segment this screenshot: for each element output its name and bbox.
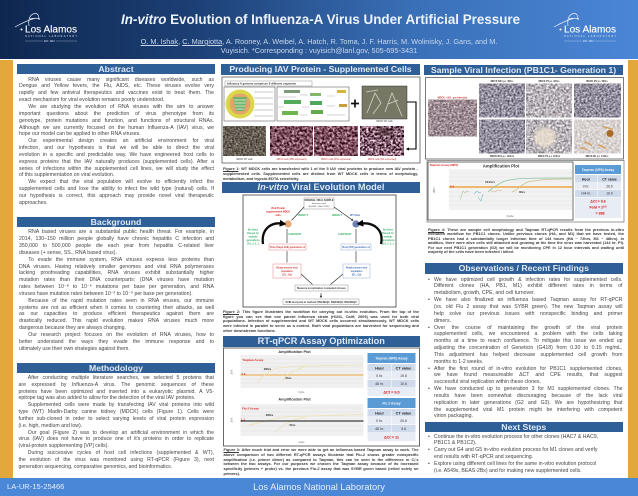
caption: figure 2: other downstream functions. bbox=[223, 329, 276, 333]
authors: O. M. Ishak, C. Margiotta, A. Rooney, A. Weibel, A. Hatch, R. Toma, J. F. Harris, M. Wolinisky, J. Gans, and M. bbox=[141, 37, 497, 46]
micrograph: MDCK WT cells bbox=[362, 86, 407, 123]
text: observations bullets: We have conducted up to generation 3 for M1 supplemented clones. The bbox=[434, 386, 622, 392]
green step labels: INFECT bbox=[332, 213, 342, 217]
text: abstract: express proteins that the IAV naturally produces (supplemented cells). After a bbox=[19, 159, 214, 165]
heading: in-vitro viral evolution model: In-vitro Viral Evolution Model bbox=[258, 182, 384, 192]
text: abstract: important questions about the prediction of virus phenotype from its bbox=[19, 111, 214, 117]
header banner bbox=[0, 0, 638, 59]
text: methodology: (viral-protein supplementing [VP] cells). bbox=[18, 443, 109, 449]
chart: Flu-2 amplification plot: Cycle bbox=[298, 441, 305, 444]
heading: RT-qPCR assay optimization bbox=[222, 336, 420, 347]
harvest nucleotide boxes: Ready amount viral bbox=[346, 266, 367, 270]
table: Flu-2 assay: ΔCt = 11 bbox=[383, 436, 399, 440]
table: Taqman NP6 PB1C1: Hour bbox=[582, 177, 591, 181]
text: methodology: During successive cycles of host cell infections (supplemented & WT), bbox=[28, 450, 214, 456]
chart: Taqman amplification plot: 48hrs bbox=[263, 367, 271, 371]
virus generation boxes: Virus (WT) generation x1 bbox=[342, 246, 371, 249]
micrograph row bbox=[223, 126, 404, 161]
chart: Taqman amplification plot bbox=[230, 350, 363, 394]
table: Taqman NP6 assay: 0 hr. bbox=[376, 374, 382, 378]
supplemented cell branch labels: Viral Protein bbox=[271, 207, 286, 210]
text: background: ultimately use their own strategies against them. bbox=[19, 346, 130, 352]
table: Flu-2 assay: 20.6 bbox=[400, 419, 406, 423]
panel: observations: • bbox=[428, 277, 430, 283]
figure 3 bbox=[223, 348, 420, 446]
panel: producing IAV protein bbox=[221, 64, 420, 181]
table: Taqman NP6 PB1C1: 144 hr. bbox=[581, 192, 591, 196]
panel: observations: • bbox=[428, 297, 430, 303]
table: Taqman NP6 assay: Hour bbox=[375, 366, 384, 370]
green step labels: By Select bbox=[248, 228, 258, 232]
micrograph: MDCK WT cells: MDCK WT cells bbox=[376, 121, 393, 123]
caption: figure 1: metabolism, and trypsin-EDTA sensitivity. bbox=[223, 177, 299, 181]
chart: Flu-2 amplification plot: Amplification Plot bbox=[278, 398, 311, 402]
heading: next steps: Next Steps bbox=[501, 422, 546, 432]
green step labels bbox=[246, 213, 395, 246]
text: background: better understand the ways they evade the immune response and to bbox=[19, 339, 214, 345]
text: observations bullets: (vs. old Flu 2 assay that was SYBR green). The new Taqman assay will bbox=[434, 304, 622, 310]
text: observations bullets: We have optimized cell growth & infection rates for supplemented cells. bbox=[434, 277, 622, 283]
text: next steps bullets: end results with RT-qPCR and sequencing. bbox=[434, 454, 533, 460]
table: Flu-2 assay: Flu 2 Assay bbox=[382, 402, 400, 406]
table: Flu-2 assay: 0 hr. bbox=[376, 419, 382, 423]
chart: PB1C1 amplification plot: Amplification Plot bbox=[483, 164, 520, 168]
chart: Flu-2 amplification plot: 0hrs bbox=[289, 423, 295, 427]
harvest nucleotide boxes: (G1...Gy) bbox=[352, 274, 362, 276]
table: Taqman NP6 PB1C1: CT value bbox=[602, 177, 617, 181]
cell icons bbox=[284, 220, 360, 228]
harvest nucleotide boxes: Ready amount viral bbox=[276, 266, 298, 270]
green step labels: Passed for bbox=[382, 233, 394, 235]
caption: figure 3: Figure 3: After much trial and error we were able to get an influenza based Taqman assay to work. The bbox=[224, 448, 418, 452]
text: methodology: (i.e. high, medium and low). bbox=[18, 423, 82, 429]
harvest nucleotide boxes: population bbox=[281, 270, 293, 273]
text: background: as our capacities to produce efficient therapeutics against them are bbox=[19, 311, 214, 317]
panel: next steps: • bbox=[428, 434, 430, 440]
text: next steps bullets: Carry out G4 and G5 in-vitro evolution process for M1 clones and verify bbox=[434, 447, 597, 453]
text: observations bullets: This adjustment has helped decrease supplemented cell growth from bbox=[434, 352, 622, 358]
table: Taqman NP6 assay: 10.6 bbox=[400, 382, 406, 386]
micrographs: bottom row: MDCK P4 p.i. 144hrs bbox=[538, 154, 561, 157]
caption: figure 2 bbox=[223, 310, 419, 333]
arrow: cells to supplemented bbox=[407, 102, 416, 149]
text: methodology: proteins have been optimized and inserted into a eukaryotic plasmid. A V5- bbox=[18, 389, 214, 395]
genome segments diagram bbox=[277, 87, 349, 121]
text: abstract: infection, and our hypothesis is that we will be able to direct the viral bbox=[19, 145, 214, 151]
measure box: Measure & replication competent viruses bbox=[297, 287, 346, 290]
heading: observations: Observations / Recent Findings bbox=[459, 263, 589, 273]
text: observations bullets: After the first round of in-vitro evolution for PB1C1 supplemented clones, bbox=[434, 366, 622, 372]
text: observations bullets: supplemented cells, we encountered a problem with the cells taking bbox=[434, 331, 622, 337]
panel: methodology bbox=[17, 363, 215, 470]
text: methodology: Our goal (Figure 2) was to develop an artificial environment in which the bbox=[28, 430, 214, 436]
panel: in-vitro viral evolution model bbox=[222, 182, 420, 333]
table: Taqman NP6 assay: ΔCt = 9.0 bbox=[383, 390, 399, 394]
table: Flu-2 assay: 48 hr. bbox=[375, 427, 383, 431]
text: background: 2014, 130–150 million people globally have chronic hepatitis C infection and bbox=[19, 236, 214, 242]
panel: RT-qPCR assay optimization bbox=[223, 336, 420, 476]
text: background: mutation rates than their DNA counterparts; (DNA viruses have mutation bbox=[19, 277, 214, 283]
parent strain box: ORIGINAL VIRAL SAMPLE bbox=[305, 199, 334, 202]
micrographs: top row: MDCK M1 p.i. 96hrs bbox=[586, 80, 608, 82]
harvest arrows bbox=[287, 229, 356, 298]
text: methodology: After conducting multiple literature searches, we selected 5 proteins that bbox=[28, 375, 214, 381]
chart: Taqman amplification plot: 0hrs bbox=[285, 376, 291, 380]
caption: figure 4: PB1C1 clones had a substantially longer infection time of 144 hours (HA ~ 72hrs, M1 ~ 48hrs). In bbox=[428, 237, 624, 241]
panel: observations: • bbox=[428, 386, 430, 392]
text: observations bullets: we have found measureable ΔCT and CPE results, that suggest bbox=[434, 372, 622, 378]
figure 2: workflow diagram bbox=[242, 194, 396, 308]
chart: Flu-2 amplification plot: 1.1 bbox=[240, 418, 245, 422]
logo: Los Alamos left: NATIONAL LABORATORY bbox=[25, 35, 77, 38]
caption: figure 4: For our next PB1C1 generation (G2) we will be monitoring CPE in 12 hour intervals and waiting until bbox=[428, 246, 624, 250]
measure box bbox=[295, 285, 348, 291]
text: observations bullets: adjusting the concentration of Geneticin (G418) from 0.30 to 0.15 mg/mL. bbox=[434, 345, 622, 351]
table: Taqman NP6 assay: 48 hr. bbox=[375, 382, 383, 386]
heading: methodology bbox=[17, 363, 215, 373]
panel: background bbox=[17, 217, 215, 352]
virus diagram bbox=[224, 87, 275, 121]
caption: figure 3: specificity (primers + probe) vs. the previous Flu-2 assay that was SYBR green based (relied solely on bbox=[224, 467, 418, 471]
text: abstract: Our experimental design creates an artificial environment for viral bbox=[28, 138, 214, 144]
caption: figure 1 bbox=[223, 167, 418, 181]
text: methodology: epitope tag was also added to allow for the detection of the viral IAV proteins. bbox=[18, 395, 195, 401]
micrographs: top row: MDCK P4 p.i. 96hrs bbox=[538, 80, 560, 82]
text: abstract: approaches. bbox=[19, 200, 48, 206]
text: methodology: the evolution of the virus was monitored using RT-qPCR (Figure 3), next bbox=[18, 457, 214, 463]
logo: Los Alamos left: Los Alamos bbox=[25, 24, 77, 36]
caption: figure 1: supplemented cells. Supplemented cells are distinct from WT MDCK cells in terms of morphology, bbox=[223, 172, 418, 176]
caption: figure 3 bbox=[224, 448, 418, 476]
text: methodology: Supplemented cells were made by transfecting IAV viral proteins into wild bbox=[28, 402, 214, 408]
caption: figure 4: majority of the cells have been infected / killed. bbox=[428, 250, 514, 254]
heading: abstract bbox=[17, 64, 215, 74]
panel: observations bbox=[425, 263, 623, 419]
authors bbox=[140, 37, 497, 55]
text: abstract: our hypothesis is correct, this approach may provide novel viral therapeutic bbox=[19, 193, 214, 199]
table: Taqman NP6 PB1C1: ΔCt = 9.6 bbox=[590, 199, 606, 203]
text: observations bullets: the supplemented viral M1 protein might be interfering with competent bbox=[434, 407, 622, 413]
text: observations bullets: Over the course of maintaining the growth of the viral protein bbox=[434, 324, 622, 330]
parent strain box bbox=[304, 198, 334, 209]
figure label: Influenza A genome comprises 8 different segments bbox=[227, 82, 297, 86]
infection arrows bbox=[292, 207, 353, 220]
caption: figure 1: Figure 1: WT MDCK cells are transfected with 1 of the 5 IAV viral proteins to produce new IAV protein - bbox=[223, 167, 418, 171]
green step labels: HARVEST bbox=[288, 232, 302, 236]
chart: Taqman amplification plot: Taqman Assay bbox=[242, 358, 263, 362]
sequencing box: SVIN and point in method: RNASEQ1, RNASEQ2, RNASEQ3 bbox=[286, 301, 357, 304]
chart: Taqman amplification plot: Amplification Plot bbox=[278, 350, 311, 354]
text: background: viruses have mutation rates between 10⁻³ to 10⁻⁵ per base per generation). bbox=[19, 291, 193, 297]
text: background: rates between 10⁻⁸ to 10⁻⁶ mutations per base per generation, and RNA bbox=[19, 284, 214, 290]
caption: figure 3: amplification (i.e. primer dimer) as compared to Taqman, this can be seen in the difference in Cₜ's bbox=[224, 458, 418, 462]
table: Taqman NP6 PB1C1: = 388 bbox=[595, 212, 605, 216]
chart: Flu-2 amplification plot: Flu-2 Assay bbox=[242, 406, 259, 410]
chart: Flu-2 amplification plot: 48hrs bbox=[265, 413, 273, 417]
micrograph: no-infection control bbox=[428, 96, 477, 136]
authors: Vuyisich. *Corresponding : vuyisich@lanl.gov, 505-695-3431 bbox=[221, 46, 417, 55]
green step labels: Passed for bbox=[247, 233, 259, 235]
text: background: RNA based viruses are a substantial public health threat. For example, in bbox=[28, 229, 214, 235]
text: background bbox=[19, 229, 214, 352]
text: abstract: rapidly and few antiviral therapeutics and vaccines exist to treat them. The bbox=[19, 90, 214, 96]
table: Taqman NP6 PB1C1: Fold = 2 bbox=[589, 206, 603, 210]
logo: Los Alamos left bbox=[14, 13, 77, 43]
text: observations bullets: Different clones (HA, PB1, M1) exhibit different rates in terms of bbox=[434, 283, 622, 289]
text: methodology: generation sequencing, comparative genomics, and bioinformatics. bbox=[18, 464, 172, 470]
heading: next steps bbox=[425, 422, 622, 432]
heading: sample viral infection: Sample Viral Infection (PB1C1- Generation 1) bbox=[431, 64, 616, 74]
text: abstract: of this supplementation on viral evolution. bbox=[19, 172, 114, 178]
panel: next steps: • bbox=[428, 447, 430, 453]
micrographs: top row bbox=[479, 80, 621, 117]
table: Taqman NP6 PB1C1 bbox=[575, 165, 621, 218]
chart: PB1C1 amplification plot: 144 hrs bbox=[485, 180, 495, 184]
panel: abstract bbox=[17, 64, 215, 206]
text: abstract: Dengue and Yellow fevers, the Flu, AIDS, etc. These viruses evolve very bbox=[19, 83, 214, 89]
caption: figure 4: addition, there were alive cells still attached and growing at the time the virus was harvested (144 hr. PI). bbox=[428, 241, 624, 245]
caption: figure 2: figure you can see that one parent influenza strain (H1N1, Calif, 2009) was used for both viral bbox=[223, 315, 419, 319]
text: background: diseases (+ sense, SS., RNA based virus). bbox=[19, 250, 117, 256]
text: background: lacking proofreading capabilities, RNA viruses exhibit substantially higher bbox=[19, 270, 214, 276]
text: background: 350,000 to 500,000 people die each year from hepatitis C-related liver bbox=[19, 243, 214, 249]
text: methodology: further sub-cloned in order to select varying levels of viral protein expression bbox=[18, 416, 214, 422]
text: background: Our research project focuses on the evolution of RNA viruses, how to bbox=[28, 332, 214, 338]
micrographs: bottom row: MDCK NS1 p.i. 144hrs bbox=[490, 154, 515, 157]
supplemented cell branch labels: supplemented MDCK bbox=[266, 210, 290, 214]
right gold band bbox=[628, 60, 638, 478]
logo: Los Alamos right: EST. 1943 bbox=[583, 41, 594, 43]
text: abstract: exact mechanism for viral evolution remains poorly understood. bbox=[19, 97, 164, 103]
text: observations bullets: replication in later generations (G2 and G3). We are hypothesizing that bbox=[434, 400, 622, 406]
chart: Taqman amplification plot: 0.6 bbox=[241, 372, 245, 376]
text: background: drastically reduced. This rapid evolution makes RNA viruses much more bbox=[19, 318, 214, 324]
text: observations bullets: metabolism, growth, CPE, and cell turnover. bbox=[434, 290, 535, 296]
caption: figure 2: populations. Infection of supplemented and WT MDCK cells occurred simultaneously. WT MDCK cells bbox=[223, 319, 419, 323]
virus generation boxes: Virus (Supp Cell) generation x1 bbox=[270, 246, 306, 249]
text: background: To evade the immune system, RNA viruses express less proteins than bbox=[28, 257, 214, 263]
text: next steps bullets: Explore using different cell lines for the same in-vitro evolution protocol bbox=[434, 461, 596, 467]
report number: LA-UR-15-25466 bbox=[7, 482, 64, 491]
panel: observations: • bbox=[428, 366, 430, 372]
text: observations bullets: virion packaging. bbox=[434, 413, 473, 419]
heading: observations bbox=[425, 263, 622, 274]
table: Taqman NP6 assay: Taqman (NP6) Assay bbox=[375, 356, 407, 360]
green step labels: multiple bbox=[384, 236, 393, 238]
supplemented cell branch labels: cells bbox=[275, 214, 281, 217]
text: methodology bbox=[18, 375, 214, 470]
caption: figure 4: Figure 4: These are sample cell morphology and Taqman RT-qPCR results from the previous in-vitro bbox=[428, 228, 624, 232]
text: observations bullets: results have been somewhat discouraging because of the lack viral bbox=[434, 393, 622, 399]
micrographs: bottom row: MDCK M1 p.i. 144hrs bbox=[586, 154, 609, 157]
chart: Taqman amplification plot: Cycle bbox=[298, 391, 305, 394]
text: abstract: supplemented cells and lose the ability to infect the wild type (natural) cells. If bbox=[19, 186, 214, 192]
text: abstract: evolution in a specific and predictable way. We have engineered host cells to bbox=[19, 152, 214, 158]
figure 4: amplification plot and table bbox=[426, 160, 624, 222]
caption: figure 3: above comparison of two different RT-qPCR assays illustrate that Flu-2 shows greater nonspecific bbox=[224, 453, 418, 457]
parent strain box: Infectious stock bbox=[312, 202, 327, 205]
figure label bbox=[225, 81, 312, 86]
table: Taqman NP6 PB1C1: 0 hr. bbox=[583, 184, 589, 188]
left gold band bbox=[0, 60, 13, 478]
heading: methodology: Methodology bbox=[89, 363, 143, 373]
text: next steps bullets: (i.e. A549s, BEAS-2Bs) and for making new supplemented cells. bbox=[434, 468, 582, 474]
text: abstract: RNA viruses cause many significant diseases worldwide, such as bbox=[28, 77, 214, 83]
harvest nucleotide boxes: (G1...Gy) bbox=[282, 274, 292, 276]
table: Taqman NP6 PB1C1: 9.6 bbox=[603, 206, 607, 208]
chart: PB1C1 amplification plot: Cycle bbox=[506, 214, 514, 218]
table: Taqman NP6 assay: CT value bbox=[395, 366, 411, 370]
caption: figure 2: were infected in parallel to serve as a control. Both viral populations are harvested for sequencing and bbox=[223, 324, 419, 328]
heading: background bbox=[17, 217, 215, 227]
text: next steps bullets bbox=[428, 434, 598, 474]
table: Taqman NP6 PB1C1: 16.9 bbox=[606, 192, 613, 196]
table: Flu-2 assay: Hour bbox=[375, 411, 384, 415]
panel: next steps: • bbox=[428, 461, 430, 467]
table: Taqman NP6 PB1C1: 26.5 bbox=[606, 184, 613, 188]
text: background: dangerous because they are always changing. bbox=[19, 325, 126, 331]
text: abstract: We expect that the viral population will evolve to efficiently infect the bbox=[28, 179, 214, 185]
chart: PB1C1 amplification plot: 0.2 bbox=[450, 184, 455, 188]
chart: PB1C1 amplification plot: ΔRn bbox=[432, 187, 436, 193]
caption: figure 4 bbox=[428, 228, 624, 254]
caption: figure 3: between the two assays. For our purposes we chosen the Taqman assay because of its increased bbox=[224, 462, 418, 466]
harvest nucleotide boxes bbox=[273, 264, 370, 278]
logo: Los Alamos right: NATIONAL LABORATORY bbox=[564, 35, 616, 38]
text: methodology: are expressed by Influenza-A virus. The genomic sequences of these bbox=[18, 382, 214, 388]
table: Taqman NP6 assay: 19.6 bbox=[400, 374, 406, 378]
text: observations bullets: months at a time to reach confluence. To mitigate this issue we ended up bbox=[434, 338, 622, 344]
micrographs: bottom row bbox=[479, 119, 621, 157]
logo: Los Alamos left: EST. 1943 bbox=[44, 41, 55, 43]
heading: background: Background bbox=[91, 217, 141, 227]
text: observations bullets: help solve our previous issues with nonspecific binding and primer bbox=[434, 311, 622, 317]
supplemented cell branch labels bbox=[266, 207, 361, 217]
text: abstract: We are studying the evolution of RNA viruses with the aim to answer bbox=[28, 104, 214, 110]
table: Flu-2 assay bbox=[367, 398, 415, 441]
plus sign bbox=[351, 100, 359, 108]
parent strain box: A (H1N1; CALIF 2009) bbox=[309, 205, 330, 208]
table: Taqman NP6 PB1C1: Taqman (NP6) Assay bbox=[582, 168, 614, 172]
footer bar bbox=[0, 478, 638, 496]
green step labels: HARVEST bbox=[338, 232, 352, 236]
text: observations bullets: months to 1-2 weeks. bbox=[434, 359, 483, 365]
text: abstract: Although we are currently focused on the human Influenza-A (IAV) virus, we bbox=[19, 124, 214, 130]
text: observations bullets bbox=[428, 277, 622, 419]
text: background: Because of the rapid mutation rates seen in RNA viruses, our immune bbox=[28, 298, 214, 304]
supplemented cell branch labels: WT Cells bbox=[350, 214, 361, 217]
micrographs: top row: MDCK NS1 p.i. 48hrs bbox=[491, 80, 514, 82]
caption: figure 2: Figure 2: This figure illustrates the workflow for carrying out in-vitro evolution. From the top of the bbox=[223, 310, 419, 314]
green step labels: multiple bbox=[249, 236, 258, 238]
title: In-vitro Evolution of Influenza-A Virus Under Artificial Pressure bbox=[121, 12, 520, 27]
curved passage arrows bbox=[263, 223, 382, 244]
text: next steps bullets: PB1C1 & PB1C2). bbox=[434, 440, 476, 446]
text: next steps bullets: Continue the in-vitro evolution process for other clones (HAC7 & HAC9, bbox=[434, 434, 598, 440]
table: Flu-2 assay: CT value bbox=[395, 411, 411, 415]
chart: Flu-2 amplification plot bbox=[230, 398, 363, 444]
heading: in-vitro viral evolution model bbox=[222, 182, 420, 193]
green step labels: (G1, 2, 3...) bbox=[382, 244, 394, 246]
micrograph row: MDCK cells (PB1 expressed) bbox=[277, 158, 307, 161]
heading: abstract: Abstract bbox=[98, 64, 134, 74]
panel: sample viral infection bbox=[424, 64, 624, 254]
text: background: systems are not as efficient when it comes to countering their attacks, as well bbox=[19, 305, 214, 311]
heading: RT-qPCR assay optimization: RT-qPCR Assay Optimization bbox=[258, 336, 385, 346]
logo: Los Alamos right: Los Alamos bbox=[564, 24, 616, 36]
green step labels: INFECT bbox=[298, 213, 308, 217]
table: Taqman NP6 assay bbox=[367, 353, 415, 396]
green step labels: (G1, 2, 3...) bbox=[247, 244, 259, 246]
text: abstract: hope our model can be applied to other RNA viruses. bbox=[19, 131, 141, 137]
chart: Taqman amplification plot: ΔRn bbox=[230, 369, 233, 374]
chart: PB1C1 amplification plot: 0hrs bbox=[519, 190, 525, 194]
figure 1 bbox=[222, 76, 420, 164]
text: methodology: virus (IAV) does not have to produce one of it's proteins in order to replicate bbox=[18, 436, 214, 442]
micrograph row: MDCK cells (M1 expressed) bbox=[368, 158, 397, 161]
micrograph: no-infection control: MDCK + NS - pre-infection bbox=[438, 96, 468, 99]
sequencing box bbox=[283, 299, 359, 304]
footer institution name: Los Alamos National Laboratory bbox=[253, 482, 385, 492]
chart: Flu-2 amplification plot: ΔRn bbox=[230, 417, 233, 422]
figure 4: micrographs bbox=[425, 77, 624, 160]
text: abstract: genotype, protein mutations and function, and functions of structural RNAs. bbox=[19, 118, 214, 124]
text: abstract bbox=[19, 77, 214, 206]
heading: producing IAV protein: Producing IAV Protein - Supplemented Cells bbox=[229, 64, 412, 74]
virus generation boxes bbox=[269, 244, 371, 250]
text: observations bullets: We have also finalized an influenza based Taqman assay for RT-qPCR bbox=[434, 297, 622, 303]
green step labels: generations bbox=[381, 239, 395, 242]
panel: next steps bbox=[425, 422, 623, 474]
text: background: DNA viruses. Having relatively smaller genomes and viral RNA polymerases bbox=[19, 264, 214, 270]
caption: figure 3: primers). bbox=[224, 472, 240, 476]
text: abstract: series of infections within the supplemented cell lines, we will study the effect bbox=[19, 166, 214, 172]
text: observations bullets: successful viral replication within these clones. bbox=[434, 379, 541, 385]
text: methodology: type (WT) Madin-Darby canine kidney (MDCK) cells (Figure 1). Cells were bbox=[18, 409, 214, 415]
green step labels: generations bbox=[246, 239, 260, 242]
logo: Los Alamos right bbox=[554, 13, 616, 43]
table: Flu-2 assay: 9.6 bbox=[401, 427, 405, 431]
text: observations bullets: dimers. bbox=[434, 318, 451, 324]
chart: PB1C1 amplification plot bbox=[428, 162, 573, 220]
micrograph row: MDCK WT cells bbox=[236, 159, 253, 161]
harvest nucleotide boxes: population bbox=[351, 270, 363, 273]
green step labels: By Select bbox=[383, 228, 393, 232]
micrograph row: MDCK cells (NS1 expressed) bbox=[321, 158, 351, 161]
caption: figure 4: evolution workflow for PB1C1 clones. Unlike previous clones (HA, and M1) that we have tested, the bbox=[428, 232, 624, 236]
chart: PB1C1 amplification plot: Taqman Assay (NP6) bbox=[430, 163, 458, 167]
panel: observations: • bbox=[428, 324, 430, 330]
